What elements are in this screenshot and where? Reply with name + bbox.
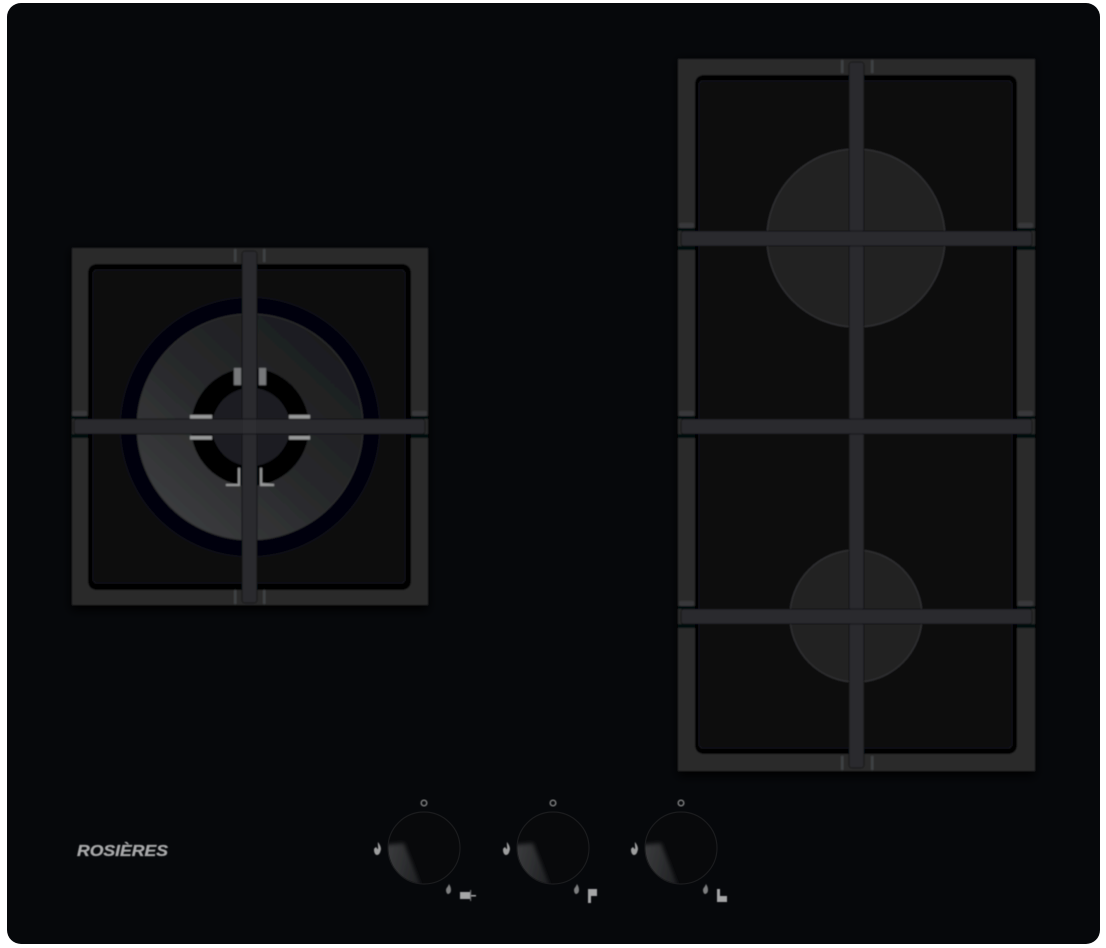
upper burner cap <box>767 149 945 327</box>
grate shadow <box>71 250 428 610</box>
frame notches <box>71 416 428 438</box>
inner plate <box>93 270 405 583</box>
frame caps <box>679 60 1033 770</box>
right burners with long grate <box>678 59 1035 776</box>
grate shadow <box>678 60 1035 776</box>
grate vertical bar <box>242 251 257 603</box>
frame notches <box>678 228 1035 628</box>
metal burner tabs <box>190 368 310 486</box>
inner burner cap <box>212 388 290 466</box>
grate vertical bar <box>849 62 864 768</box>
knob 3 <box>644 812 718 884</box>
grate horizontal bar <box>74 419 425 434</box>
position icon: bottom right burner <box>717 889 727 902</box>
burner centre well <box>191 368 309 486</box>
grate upper bar <box>681 231 1032 246</box>
position icon: top right burner <box>588 889 597 903</box>
burner outer ring <box>120 297 380 557</box>
off markers <box>421 800 684 806</box>
grate cross joint <box>243 420 256 433</box>
burner cap <box>137 314 363 540</box>
lower burner cap <box>790 550 922 682</box>
position icon: left burner <box>460 890 476 901</box>
grate lower bar <box>681 609 1032 624</box>
control knobs <box>374 800 727 903</box>
knob 1 <box>388 812 460 884</box>
small flame icons <box>446 884 708 894</box>
large flame icons <box>374 842 638 855</box>
brand logo: ROSIÈRES <box>77 841 168 860</box>
grate frame <box>678 59 1035 771</box>
frame caps <box>72 249 427 604</box>
grate middle bar <box>681 419 1032 434</box>
knob 2 <box>516 812 590 884</box>
inner plate <box>699 81 1012 748</box>
grate frame <box>72 248 428 605</box>
left wok burner with grate <box>71 248 428 610</box>
